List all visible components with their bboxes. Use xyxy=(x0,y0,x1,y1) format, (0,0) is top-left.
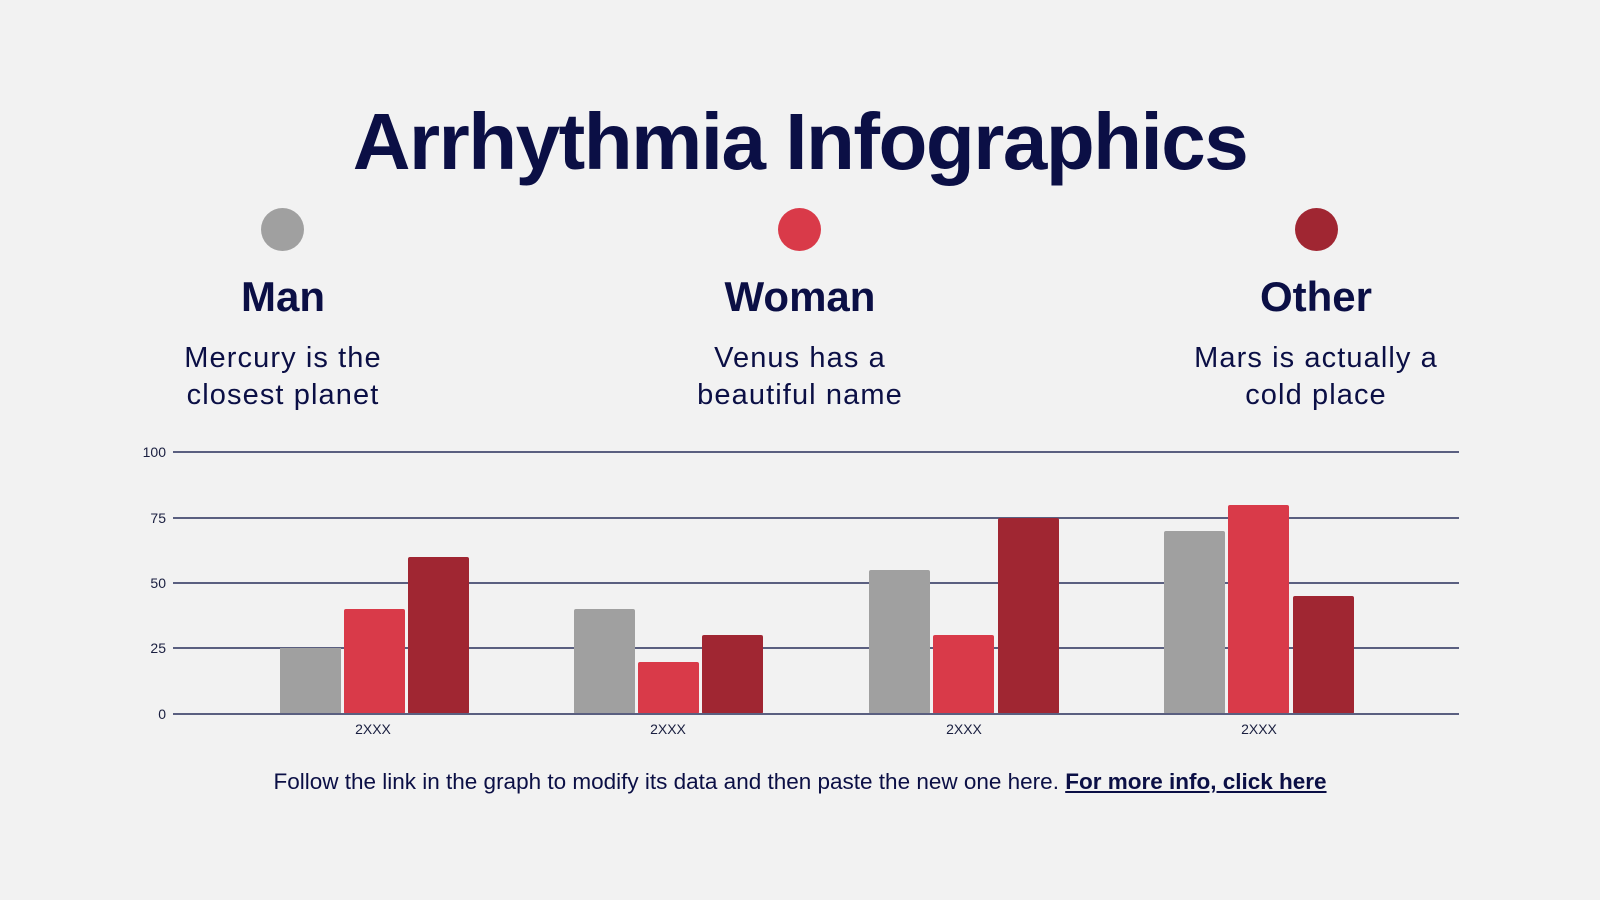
heading: man: Man xyxy=(241,273,325,320)
bar chart: 100 xyxy=(143,444,166,460)
icon: woman dot xyxy=(778,208,821,251)
bar chart: 2XXX xyxy=(1241,721,1278,737)
icon: other dot xyxy=(1295,208,1338,251)
icon: man dot xyxy=(261,208,304,251)
text: other xyxy=(1194,342,1438,411)
heading: woman: Woman xyxy=(725,273,875,320)
text: woman: Venus has a xyxy=(714,342,886,374)
text: woman: beautiful name xyxy=(697,379,903,411)
text: other: Mars is actually a xyxy=(1194,342,1438,374)
text: woman xyxy=(697,342,903,411)
text: other: cold place xyxy=(1245,379,1387,411)
title: Arrhythmia Infographics xyxy=(353,97,1247,186)
bar chart: 2XXX xyxy=(650,721,687,737)
heading: other: Other xyxy=(1260,273,1372,320)
bar chart: 75 xyxy=(150,510,166,526)
text: man: Mercury is the xyxy=(184,342,382,374)
bar chart: 25 xyxy=(150,640,166,656)
bar chart: 2XXX xyxy=(946,721,983,737)
text: man: closest planet xyxy=(187,379,379,411)
footer text: Follow the link in the graph to modify its data and then paste the new one here. For more info, click here xyxy=(273,769,1327,794)
bar chart: 50 xyxy=(150,575,166,591)
text: man xyxy=(184,342,382,411)
bar chart: 0 xyxy=(158,706,166,722)
bar chart: 2XXX xyxy=(355,721,392,737)
